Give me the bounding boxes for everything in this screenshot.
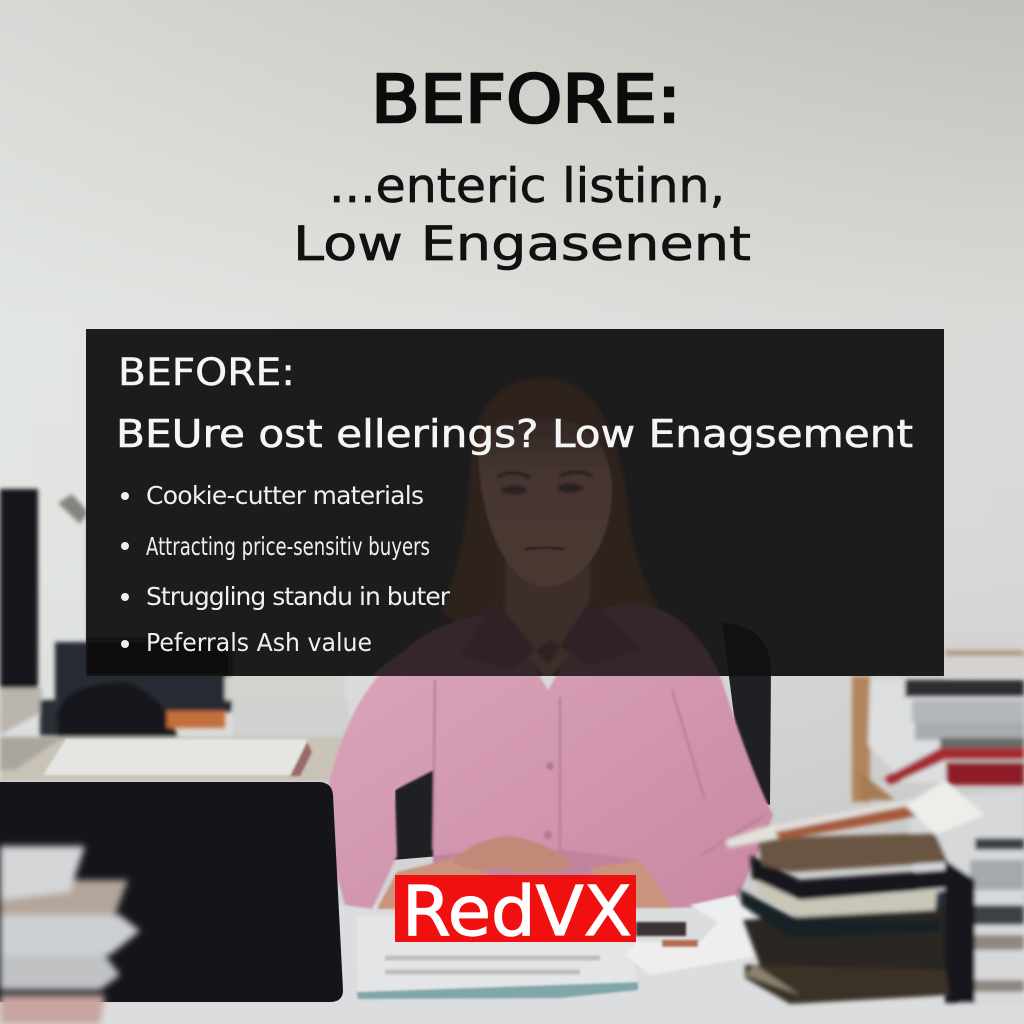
dark mid book — [743, 905, 945, 970]
shirt torso and sleeves — [327, 609, 773, 909]
panel subheading: BEUre ost ellerings? Low Enagsement — [116, 412, 913, 456]
logo: RedVX: RedVX — [402, 872, 632, 952]
shirt shoulders — [372, 604, 720, 676]
lower torso — [433, 845, 643, 907]
ghosted woman behind panel — [86, 378, 771, 690]
title: BEFORE: — [371, 61, 681, 138]
white pages at right — [905, 780, 985, 835]
chair back — [392, 623, 771, 860]
bullet list: Struggling standu in buter — [146, 582, 451, 611]
face — [478, 416, 612, 587]
left foreground paper stack — [0, 846, 140, 1024]
forearms — [377, 858, 673, 909]
dark bottom book — [745, 965, 950, 1004]
right bookshelf with stacked books — [852, 636, 1024, 802]
navy book — [737, 888, 945, 925]
bullet list: Attracting price-sensitiv buyers — [146, 532, 430, 561]
brown top book — [757, 833, 948, 872]
right foreground book stack — [725, 780, 1024, 1004]
left desk equipment: monitor, lamp, printer, phone — [0, 489, 350, 782]
subtitle: Low Engasenent — [293, 217, 751, 272]
bullet list: Peferrals Ash value — [146, 628, 372, 657]
dark overlay panel — [86, 329, 944, 690]
woman — [327, 609, 773, 909]
left desk papers — [43, 739, 312, 776]
cream book — [757, 875, 937, 917]
hair — [440, 378, 660, 640]
laptop — [0, 782, 343, 1002]
papers on desk — [357, 895, 762, 999]
subtitle: ...enteric listinn, — [329, 159, 725, 214]
background stack column — [905, 790, 1024, 1004]
hands — [453, 836, 572, 873]
desk surface — [0, 905, 1024, 1024]
mouth — [525, 547, 565, 550]
neck — [505, 560, 590, 680]
angled open book — [725, 797, 940, 848]
dark book — [750, 855, 945, 900]
bullet list: Cookie-cutter materials — [146, 481, 424, 510]
panel heading: BEFORE: — [118, 351, 295, 394]
bullet list — [121, 481, 451, 657]
eyes and brows — [497, 472, 592, 494]
shirt folds, placket and buttons — [433, 680, 765, 856]
subtitle — [293, 159, 751, 272]
collar — [488, 602, 598, 664]
